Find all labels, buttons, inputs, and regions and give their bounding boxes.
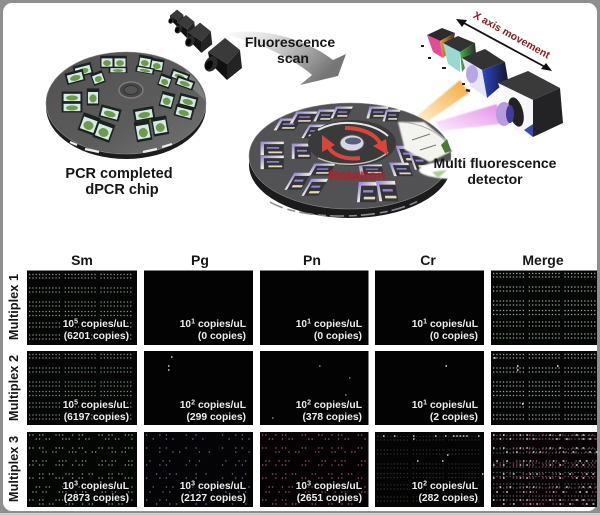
copies labels: multiplex 3: copies/uL bbox=[311, 481, 362, 492]
panel: Pn multiplex 2 bbox=[260, 351, 368, 425]
copies labels: multiplex 2: 10 bbox=[296, 400, 307, 411]
copies labels: multiplex 3: copies/uL bbox=[78, 481, 129, 492]
copies labels: multiplex 2: copies/uL bbox=[311, 400, 362, 411]
copies labels: multiplex 3: (282 copies) bbox=[418, 493, 478, 504]
copies labels: multiplex 1: copies/uL bbox=[427, 319, 478, 330]
chip cluster: top bbox=[100, 56, 127, 73]
copies labels: multiplex 3: 3 bbox=[74, 480, 78, 488]
copies labels: multiplex 3: 3 bbox=[191, 480, 195, 488]
copies labels: multiplex 2: (378 copies) bbox=[302, 412, 362, 423]
centre ring bbox=[308, 120, 396, 166]
label: Multi fluorescence detector: Multi fluorescence bbox=[434, 155, 557, 171]
column headers: Cr bbox=[420, 252, 436, 268]
camera 1 (near) bbox=[496, 71, 563, 137]
row headers: Multiplex 2 bbox=[6, 355, 21, 421]
copies labels: multiplex 2: (299 copies) bbox=[186, 412, 246, 423]
x axis double arrow bbox=[456, 19, 552, 71]
multiplex 2 images bbox=[27, 351, 599, 425]
column headers bbox=[71, 252, 564, 268]
copies labels: multiplex 2 bbox=[63, 400, 478, 423]
left scan cameras bbox=[167, 10, 242, 80]
panel: Cr multiplex 1 bbox=[375, 270, 484, 345]
copies labels: multiplex 3: 2 bbox=[423, 480, 427, 488]
copies labels: multiplex 2: copies/uL bbox=[78, 400, 129, 411]
rotation label: Rotation bbox=[329, 167, 385, 183]
x axis label: X axis movement bbox=[471, 9, 552, 62]
panel: Pn multiplex 3 bbox=[260, 432, 368, 507]
copies labels: multiplex 1: copies/uL bbox=[311, 319, 362, 330]
panel: Cr multiplex 3 bbox=[375, 432, 484, 507]
label: Fluorescence scan: Fluorescence bbox=[245, 34, 335, 50]
panel: Merge multiplex 1 bbox=[491, 270, 599, 345]
camera 4 (far) bbox=[421, 28, 455, 58]
left dPCR chip disc bbox=[46, 52, 206, 159]
copies labels: multiplex 1: (6201 copies) bbox=[64, 331, 129, 342]
copies labels: multiplex 1: copies/uL bbox=[195, 319, 246, 330]
chip cluster: bottom left bbox=[77, 104, 122, 143]
copies labels: multiplex 2: copies/uL bbox=[195, 400, 246, 411]
row headers bbox=[6, 274, 21, 502]
hub bbox=[340, 135, 364, 151]
panel: Sm multiplex 2 bbox=[27, 351, 137, 425]
label: PCR completed dPCR chip: PCR completed bbox=[65, 166, 173, 182]
copies labels: multiplex 1: 10 bbox=[412, 319, 423, 330]
panel: Sm multiplex 3 bbox=[27, 432, 137, 507]
copies labels: multiplex 2: 2 bbox=[307, 400, 311, 406]
multiplex 3 images bbox=[27, 432, 599, 507]
copies labels: multiplex 3: copies/uL bbox=[195, 481, 246, 492]
orange beam bbox=[412, 80, 469, 124]
copies labels: multiplex 3: 10 bbox=[63, 481, 74, 492]
panel: Pg multiplex 2 bbox=[144, 351, 253, 425]
panel: Pn multiplex 1 bbox=[260, 270, 368, 345]
copies labels: multiplex 2: 10 bbox=[412, 400, 423, 411]
panel: Pg multiplex 1 bbox=[144, 270, 253, 345]
panel: Cr multiplex 2 bbox=[375, 351, 484, 425]
row headers: Multiplex 1 bbox=[6, 274, 21, 340]
panel: Sm multiplex 1 bbox=[27, 270, 137, 345]
camera 3 bbox=[442, 36, 476, 84]
chip cluster: top right bbox=[135, 55, 165, 75]
copies labels: multiplex 2: copies/uL bbox=[427, 400, 478, 411]
label: PCR completed dPCR chip: dPCR chip bbox=[85, 182, 159, 198]
copies labels: multiplex 2: 10 bbox=[180, 400, 191, 411]
curved scan arrow bbox=[222, 32, 346, 85]
copies labels: multiplex 3: 3 bbox=[307, 480, 311, 488]
copies labels: multiplex 2: 2 bbox=[191, 400, 195, 406]
copies labels: multiplex 3: (2127 copies) bbox=[181, 493, 246, 504]
copies labels: multiplex 1: 1 bbox=[423, 318, 427, 326]
right scanned disc bbox=[249, 103, 451, 218]
column headers: Pn bbox=[303, 252, 321, 268]
label: Multi fluorescence detector bbox=[434, 155, 557, 187]
chip cluster: right bbox=[158, 91, 199, 120]
chip cluster: right top bbox=[157, 68, 195, 91]
copies labels: multiplex 3: 10 bbox=[180, 481, 191, 492]
panel: Pg multiplex 3 bbox=[144, 432, 253, 507]
copies labels: multiplex 1: 1 bbox=[191, 318, 195, 326]
chip cluster: left bbox=[62, 88, 99, 112]
label: Fluorescence scan bbox=[245, 34, 335, 66]
column headers: Merge bbox=[522, 252, 564, 268]
chip cluster: bottom right bbox=[133, 106, 169, 142]
copies labels: multiplex 2: 1 bbox=[423, 400, 427, 406]
rotation arrows bbox=[328, 128, 380, 158]
copies labels: multiplex 1: 10 bbox=[63, 319, 74, 330]
copies labels: multiplex 2: (6197 copies) bbox=[64, 412, 129, 423]
panel: Merge multiplex 3 bbox=[491, 432, 599, 507]
row headers: Multiplex 3 bbox=[6, 436, 21, 502]
copies labels: multiplex 2: (2 copies) bbox=[430, 412, 478, 423]
copies labels: multiplex 1: 5 bbox=[74, 318, 78, 326]
copies labels: multiplex 3: 10 bbox=[412, 481, 423, 492]
multi fluorescence detector cameras bbox=[421, 28, 563, 137]
iridescent chips bbox=[262, 108, 430, 202]
copies labels: multiplex 3 bbox=[63, 480, 478, 504]
label: Multi fluorescence detector: detector bbox=[467, 171, 523, 187]
label: PCR completed dPCR chip bbox=[65, 166, 173, 198]
copies labels: multiplex 1: 10 bbox=[180, 319, 191, 330]
multiplex 1 images bbox=[27, 270, 599, 345]
panel: Merge multiplex 2 bbox=[491, 351, 599, 425]
washed out disc edge bbox=[398, 122, 491, 179]
copies labels: multiplex 2: 5 bbox=[74, 400, 78, 406]
copies labels: multiplex 3: (2873 copies) bbox=[64, 493, 129, 504]
column headers: Sm bbox=[71, 252, 93, 268]
copies labels: multiplex 1: 1 bbox=[307, 318, 311, 326]
purple beam bbox=[436, 104, 501, 131]
copies labels: multiplex 1: (0 copies) bbox=[314, 331, 362, 342]
chip cluster: top left bbox=[64, 62, 106, 86]
copies labels: multiplex 1: (0 copies) bbox=[198, 331, 246, 342]
label: Fluorescence scan: scan bbox=[277, 50, 309, 66]
copies labels: multiplex 1 bbox=[63, 318, 478, 342]
column headers: Pg bbox=[191, 252, 209, 268]
copies labels: multiplex 2: 10 bbox=[63, 400, 74, 411]
copies labels: multiplex 1: copies/uL bbox=[78, 319, 129, 330]
copies labels: multiplex 1: 10 bbox=[296, 319, 307, 330]
camera 2 bbox=[462, 49, 508, 98]
copies labels: multiplex 3: (2651 copies) bbox=[297, 493, 362, 504]
copies labels: multiplex 3: 10 bbox=[296, 481, 307, 492]
copies labels: multiplex 3: copies/uL bbox=[427, 481, 478, 492]
copies labels: multiplex 1: (0 copies) bbox=[430, 331, 478, 342]
